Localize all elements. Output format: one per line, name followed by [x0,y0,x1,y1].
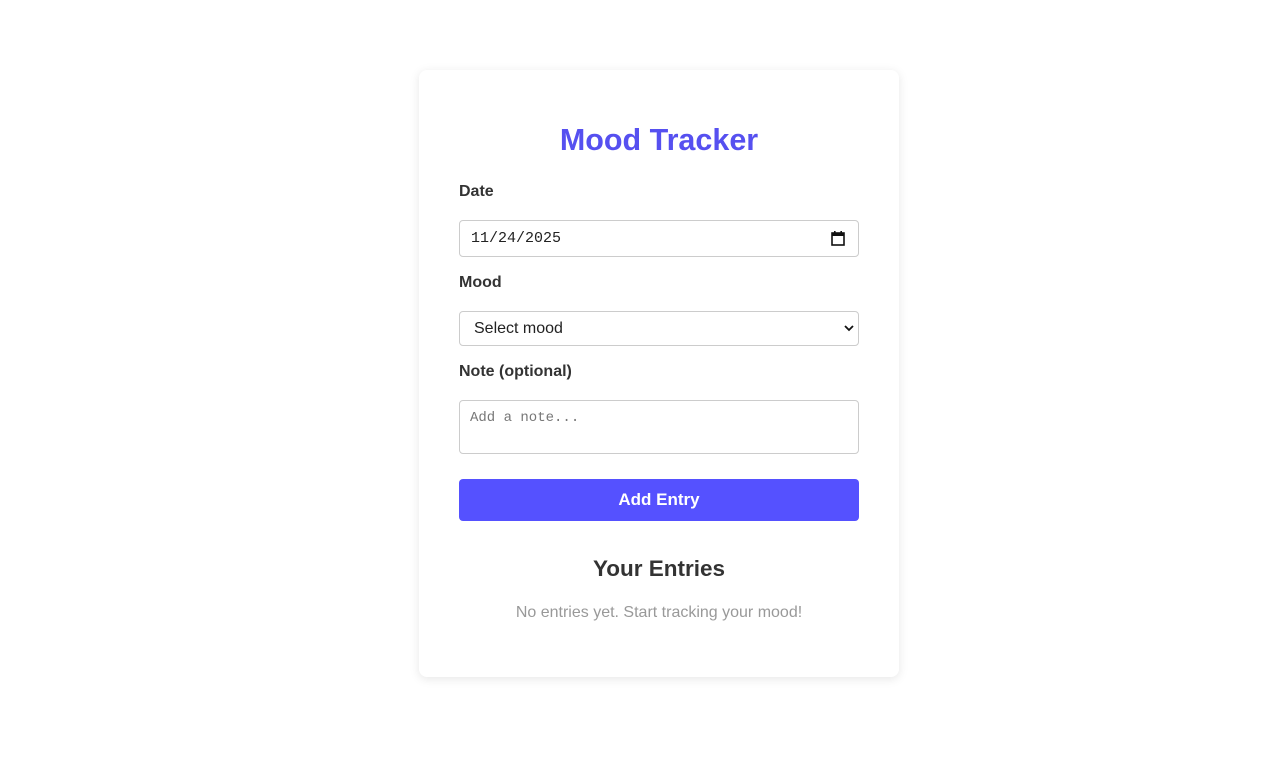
input: date [459,220,859,257]
button: add entry [459,479,859,521]
textarea: note: Add a note... [470,410,579,426]
panel: mood tracker card [419,70,899,677]
input: date: 11/24/2025 [471,230,561,247]
label: date: Date [459,183,494,200]
textarea: note [459,400,859,454]
icon: chevron [844,325,854,332]
heading: your entries: Your Entries [593,556,725,581]
label: mood: Mood [459,274,502,291]
icon: calendar [831,231,845,246]
text: empty state: No entries yet. Start tracking your mood! [516,604,802,621]
title: Mood Tracker [560,123,758,157]
select: mood: Select mood [474,320,563,337]
select: mood [459,311,859,346]
button: add entry: Add Entry [618,490,700,509]
label: note: Note (optional) [459,363,572,380]
